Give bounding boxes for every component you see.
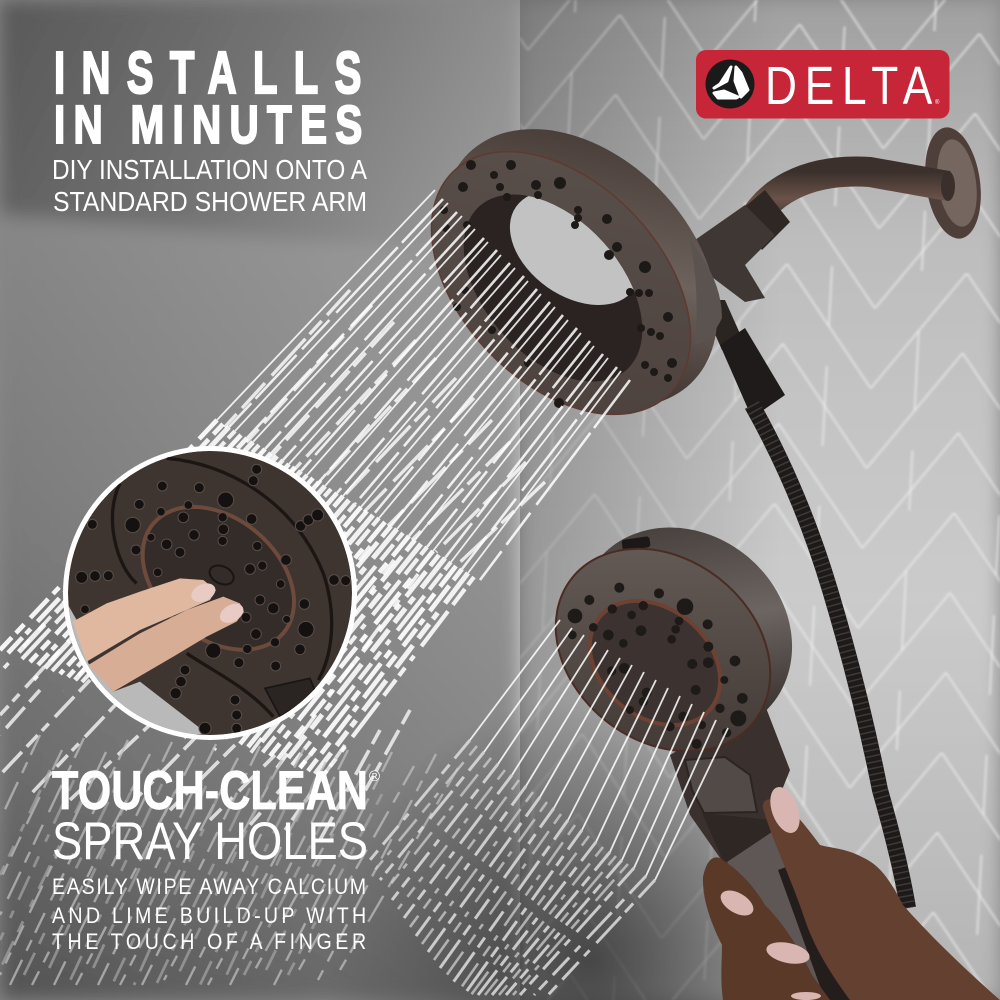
- two fingers: [73, 578, 247, 692]
- mount bracket: [695, 205, 785, 418]
- fine streaks near hand shower: [470, 620, 728, 880]
- heading: touch-clean spray holes: ®: [369, 768, 380, 785]
- fragmented droplets C: [15, 427, 468, 774]
- fragmented droplets B: [8, 424, 462, 771]
- text: installation description: [52, 154, 367, 217]
- heading: installs in minutes: INSTALLS: [54, 39, 361, 106]
- fingernails: [716, 783, 821, 1000]
- inset spray holes: [76, 464, 351, 734]
- text: installation description: STANDARD SHOWER ARM: [53, 186, 367, 217]
- callout: touch-clean inset circle: [60, 446, 357, 740]
- hand shower spray holes: [568, 583, 748, 749]
- text: touch-clean description: EASILY WIPE AWAY CALCIUM: [52, 875, 366, 899]
- logo mark: [706, 60, 754, 108]
- main water spray: [0, 190, 630, 840]
- heading: installs in minutes: IN MINUTES: [54, 95, 362, 155]
- hand shower head: [516, 484, 858, 1000]
- heading: touch-clean spray holes: [52, 760, 380, 871]
- lower faded water streaks behind text: [0, 735, 458, 985]
- Delta logo badge: [696, 50, 950, 118]
- plate grooves: [112, 458, 332, 717]
- hand shower water spray: [370, 620, 728, 995]
- handle button: [685, 757, 757, 813]
- fine streaks near overhead head: [217, 190, 621, 573]
- heading: touch-clean spray holes: TOUCH-CLEAN: [52, 760, 368, 821]
- overhead shower head: [430, 129, 722, 416]
- registered mark: ®: [935, 99, 940, 106]
- handle: [670, 700, 850, 1000]
- hose: [752, 405, 908, 908]
- text: touch-clean description: [52, 875, 366, 954]
- logo wordmark: DELTA: [765, 56, 932, 116]
- heading: touch-clean spray holes: SPRAY HOLES: [52, 812, 368, 871]
- spray holes on overhead head: [440, 160, 677, 408]
- shower arm and wall flange: [735, 124, 988, 250]
- mid-spray filler streaks: [222, 290, 545, 566]
- text: touch-clean description: AND LIME BUILD-UP WITH: [52, 904, 366, 928]
- extra droplets offset: [4, 452, 418, 772]
- hand holding shower: [703, 783, 1000, 1000]
- droplets below inset circle: [0, 650, 410, 840]
- text: installation description: DIY INSTALLATION ONTO A: [52, 154, 367, 185]
- fragmented droplets A: [0, 420, 456, 768]
- grey background visible behind plate: [68, 606, 202, 734]
- text: touch-clean description: THE TOUCH OF A FINGER: [52, 930, 366, 954]
- fragmented streaks far from hand shower: [370, 740, 655, 995]
- fragmented droplets D: [22, 431, 474, 777]
- medium streaks: [229, 199, 630, 580]
- heading: installs in minutes: [54, 39, 362, 155]
